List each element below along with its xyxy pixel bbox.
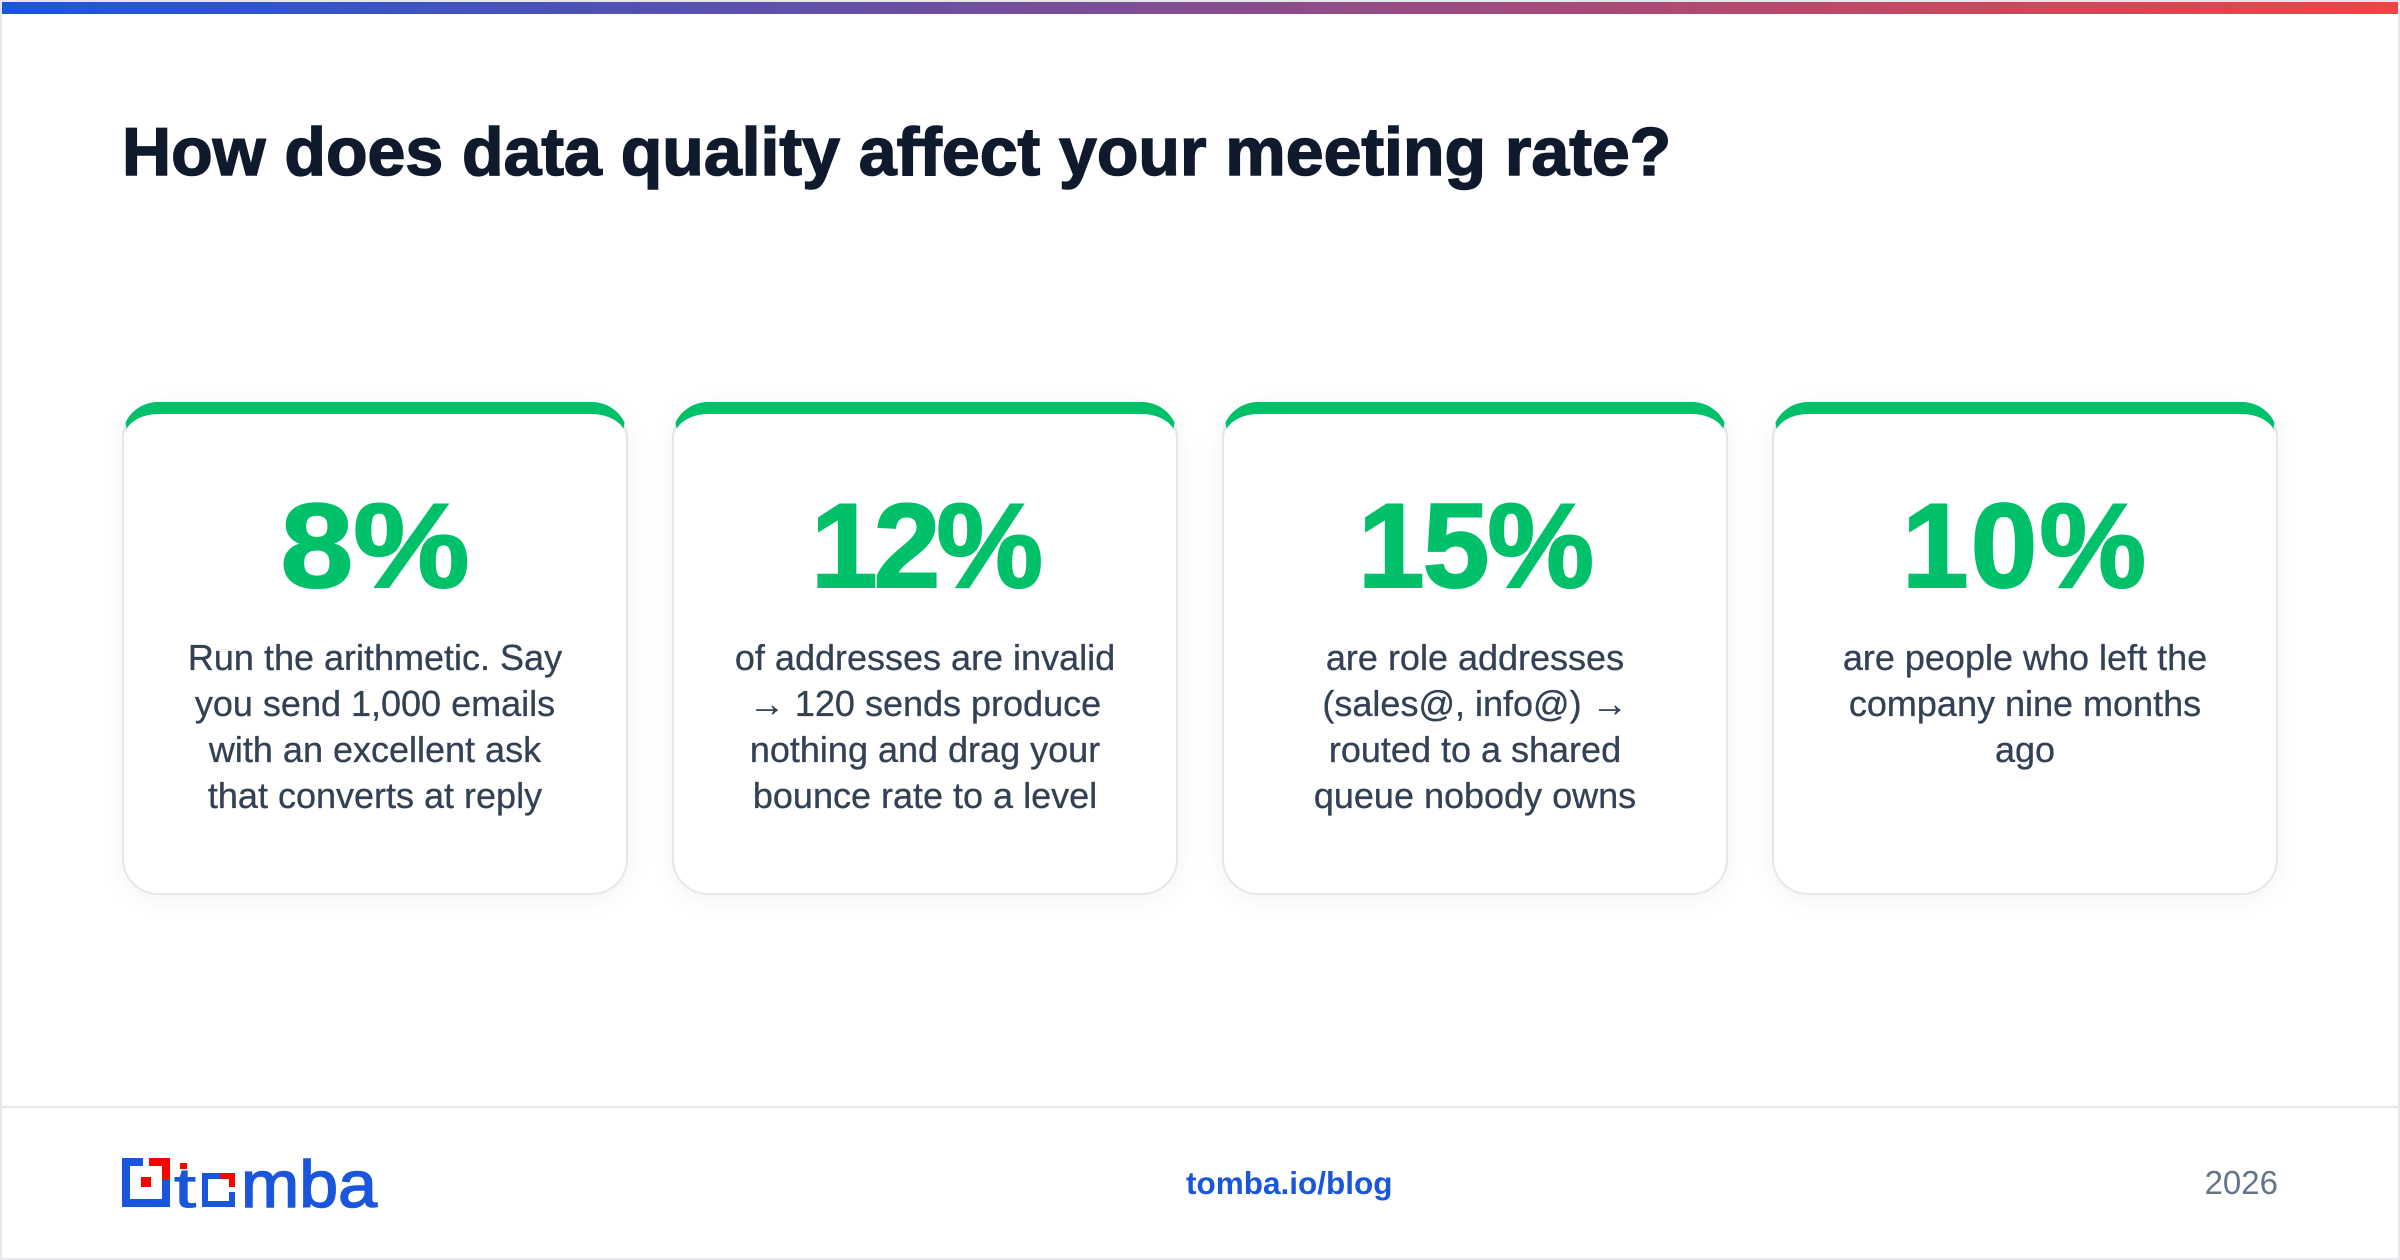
icon: logo mark	[122, 1158, 170, 1207]
description: 15%: are role addresses	[1326, 637, 1624, 678]
stat: 12%: 12%	[811, 479, 1039, 613]
description: 15%: routed to a shared	[1329, 729, 1621, 770]
description: 10%	[1843, 637, 2207, 770]
card: 8%	[122, 402, 628, 895]
description: 8%: with an excellent ask	[209, 729, 541, 770]
footer divider	[2, 1106, 2398, 1108]
description: 15%	[1314, 637, 1636, 816]
card: 12%	[672, 402, 1178, 895]
description: 15%: queue nobody owns	[1314, 775, 1636, 816]
footer link: tomba.io/blog	[1186, 1165, 1392, 1201]
description: 10%: ago	[1995, 729, 2055, 770]
description: 12%: → 120 sends produce	[749, 683, 1101, 724]
logo: tomba	[122, 1158, 378, 1210]
description: 12%: nothing and drag your	[750, 729, 1100, 770]
description: 12%: bounce rate to a level	[753, 775, 1097, 816]
logo wordmark	[174, 1147, 377, 1221]
card: 10%	[1772, 402, 2278, 895]
description: 8%: you send 1,000 emails	[195, 683, 555, 724]
description: 8%: Run the arithmetic. Say	[188, 637, 562, 678]
description: 8%: that converts at reply	[208, 775, 542, 816]
stat: 10%: 10%	[1902, 479, 2148, 613]
description: 8%	[188, 637, 562, 816]
description: 15%: (sales@, info@) →	[1322, 683, 1628, 724]
footer year: 2026	[2205, 1164, 2278, 1201]
top gradient bar	[2, 2, 2398, 14]
description: 10%: company nine months	[1849, 683, 2201, 724]
description: 12%	[735, 637, 1115, 816]
title: How does data quality affect your meeting rate?	[122, 114, 1671, 190]
description: 12%: of addresses are invalid	[735, 637, 1115, 678]
stat: 15%: 15%	[1358, 479, 1592, 613]
description: 10%: are people who left the	[1843, 637, 2207, 678]
stat: 8%: 8%	[280, 479, 470, 613]
card: 15%	[1222, 402, 1728, 895]
